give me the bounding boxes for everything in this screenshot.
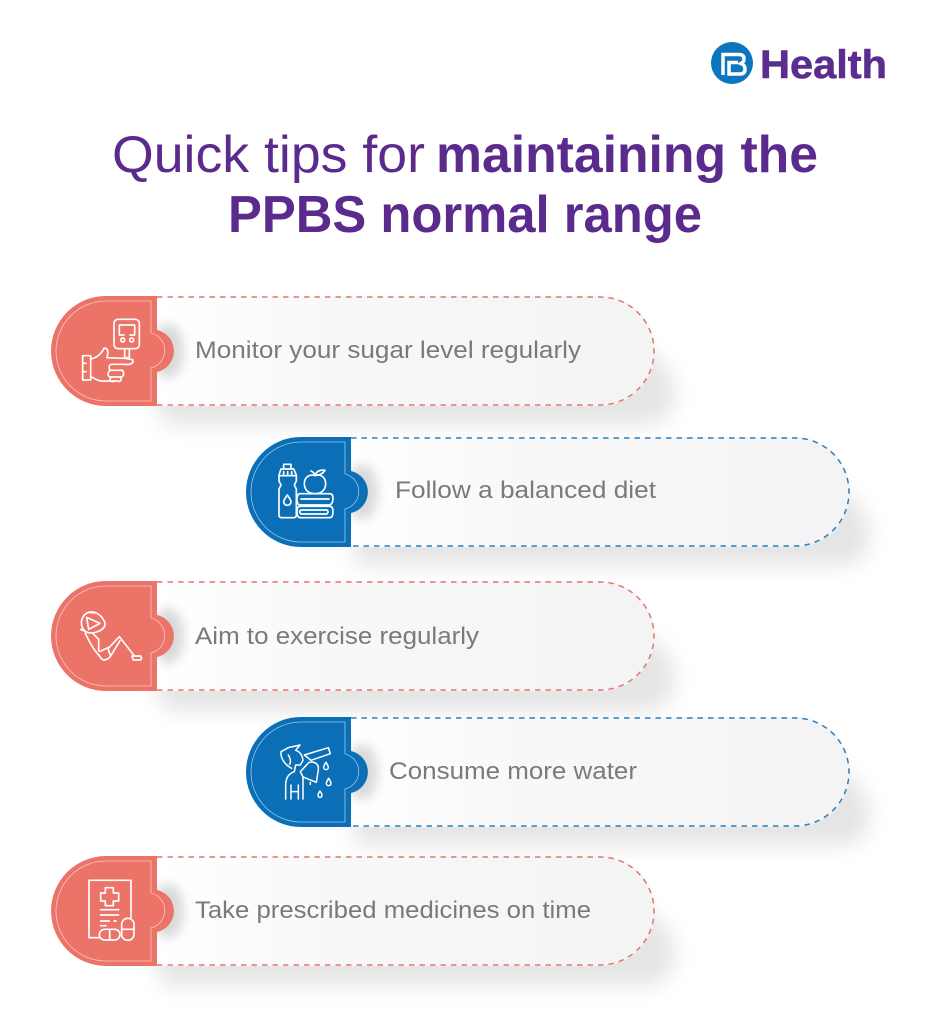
panel: tip 5 medicines [51, 856, 675, 986]
logo mark [711, 42, 753, 84]
logo: BHealth [711, 42, 887, 87]
panel: tip 2 balanced diet [246, 437, 870, 566]
icon: person doing sit-ups [81, 612, 142, 660]
panel: tip 1 monitor sugar [51, 296, 675, 425]
panel: tip 4 water [246, 717, 870, 846]
icon: glucose meter and hand [83, 319, 139, 382]
text: Take prescribed medicines on time [195, 897, 591, 924]
text: Aim to exercise regularly [195, 623, 480, 650]
text: Follow a balanced diet [395, 477, 656, 504]
logo word: Health [760, 43, 887, 87]
panel: tip 3 exercise [51, 581, 675, 711]
icon: man drinking water [281, 745, 331, 799]
text: Consume more water [389, 758, 637, 785]
icon: prescription and pills [89, 880, 134, 940]
title: maintaining the [436, 126, 818, 184]
text: Monitor your sugar level regularly [195, 337, 582, 364]
title [112, 126, 818, 244]
title: PPBS normal range [228, 186, 702, 244]
icon: bottle, apple and towels [279, 464, 333, 518]
title: Quick tips for [112, 126, 425, 184]
